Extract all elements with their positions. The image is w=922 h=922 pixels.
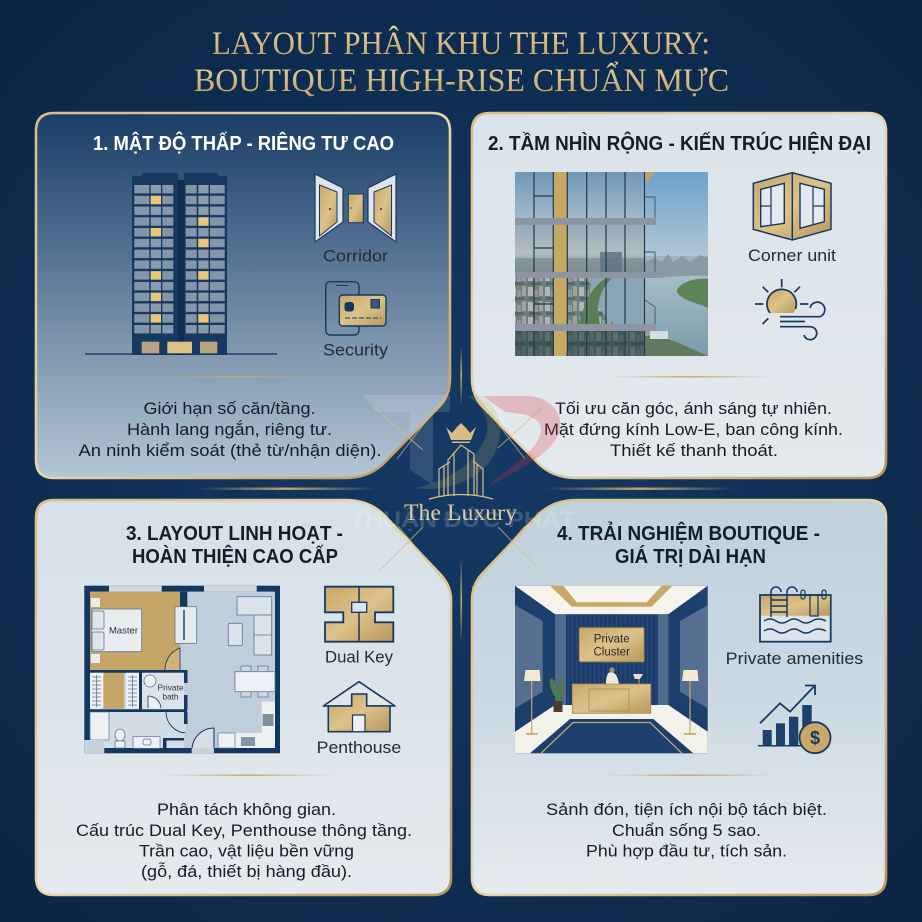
panel 2 body text: [544, 400, 843, 460]
panel 3 body text: (gỗ, đá, thiết bị hàng đầu).: [141, 862, 352, 881]
title: [194, 25, 729, 99]
icon: investment growth: $: [810, 728, 820, 748]
panel 4 body text: Sảnh đón, tiện ích nội bộ tách biệt.: [546, 801, 827, 819]
title: LAYOUT PHÂN KHU THE LUXURY:: [212, 25, 710, 62]
crown: [446, 423, 476, 443]
panel 1 body text: [78, 400, 382, 460]
label: master: Master: [109, 626, 138, 636]
title: BOUTIQUE HIGH-RISE CHUẨN MỰC: [194, 61, 729, 99]
logo: the luxury: [404, 423, 518, 525]
sign text: [593, 633, 630, 658]
panel 3 body text: [76, 801, 412, 881]
label: corner unit: Corner unit: [748, 247, 836, 265]
panel 4 body text: [546, 801, 827, 860]
illustration: city view from tower: [515, 172, 708, 356]
label: corridor: Corridor: [323, 248, 389, 266]
towers: [429, 445, 493, 499]
panel 2 body text: Mặt đứng kính Low-E, ban công kính.: [544, 421, 843, 439]
watermark text: THUẬN ĐỨC PHÁT: [350, 507, 576, 532]
panel 2 heading: 2. TẦM NHÌN RỘNG - KIẾN TRÚC HIỆN ĐẠI: [488, 131, 871, 155]
plant: [550, 674, 564, 712]
center gold accent lines: [197, 345, 735, 645]
panel 1 body text: An ninh kiểm soát (thẻ từ/nhận diện).: [78, 442, 382, 460]
panel 4 background: [472, 500, 886, 895]
panel: tầm nhìn rộng: [472, 113, 886, 478]
panel 2 body text: Tối ưu căn góc, ánh sáng tự nhiên.: [555, 400, 832, 418]
panel 3 body text: Phân tách không gian.: [157, 801, 336, 819]
icon: security: [326, 282, 386, 335]
illustration: private cluster lobby: [515, 586, 708, 753]
panel: layout linh hoạt: [36, 500, 451, 895]
label: security: Security: [323, 342, 389, 360]
illustration: floor plan: [84, 586, 280, 753]
panel 3 body text: Trần cao, vật liệu bền vững: [139, 842, 354, 860]
icon: penthouse: [323, 682, 395, 732]
panel 4 heading: GIÁ TRỊ DÀI HẠN: [615, 545, 766, 568]
panel 2 background: [472, 113, 886, 478]
floor lamps: [524, 670, 698, 735]
label: private bath: bath: [162, 692, 178, 702]
icon: corner unit: [753, 173, 831, 240]
panel 3 body text: Cấu trúc Dual Key, Penthouse thông tầng.: [76, 822, 412, 840]
panel 1 background: [36, 113, 450, 478]
panel 1 body text: Giới hạn số căn/tầng.: [144, 400, 316, 418]
label: penthouse: Penthouse: [317, 739, 401, 757]
sign text: Private: [594, 633, 630, 645]
receptionist and desk lamp: [606, 667, 643, 684]
label: private amenities: Private amenities: [726, 650, 863, 668]
panel 4 heading: [557, 521, 820, 568]
panel: trải nghiệm boutique: [472, 500, 886, 895]
icon: dual key: [325, 587, 393, 642]
logo text: The Luxury: [404, 500, 518, 525]
panel 3 heading: HOÀN THIỆN CAO CẤP: [132, 544, 338, 568]
panel 3 heading: 3. LAYOUT LINH HOẠT -: [126, 523, 343, 545]
label: private bath: [158, 684, 184, 702]
panel 4 body text: Phù hợp đầu tư, tích sản.: [586, 842, 787, 860]
sign text: Cluster: [593, 646, 630, 658]
icon: private pool: [760, 587, 831, 642]
panel: mật độ thấp: [36, 113, 450, 478]
panel 3 heading: [126, 523, 343, 568]
panel 4 body text: Chuẩn sống 5 sao.: [612, 822, 761, 840]
panel 1 heading: 1. MẬT ĐỘ THẤP - RIÊNG TƯ CAO: [93, 131, 394, 155]
label: private bath: Private: [158, 684, 184, 692]
icon: corridor: [315, 174, 396, 242]
panel 3 background: [36, 500, 451, 895]
illustration: tower: [85, 173, 277, 355]
panel 4 heading: 4. TRẢI NGHIỆM BOUTIQUE -: [557, 521, 820, 545]
icon: investment growth: [758, 686, 830, 753]
panel 1 body text: Hành lang ngắn, riêng tư.: [127, 420, 332, 439]
label: dual key: Dual Key: [325, 649, 394, 667]
watermark: company logo: [362, 395, 560, 489]
icon: sun and wind: [755, 279, 825, 340]
panel 2 body text: Thiết kế thanh thoát.: [610, 442, 778, 460]
